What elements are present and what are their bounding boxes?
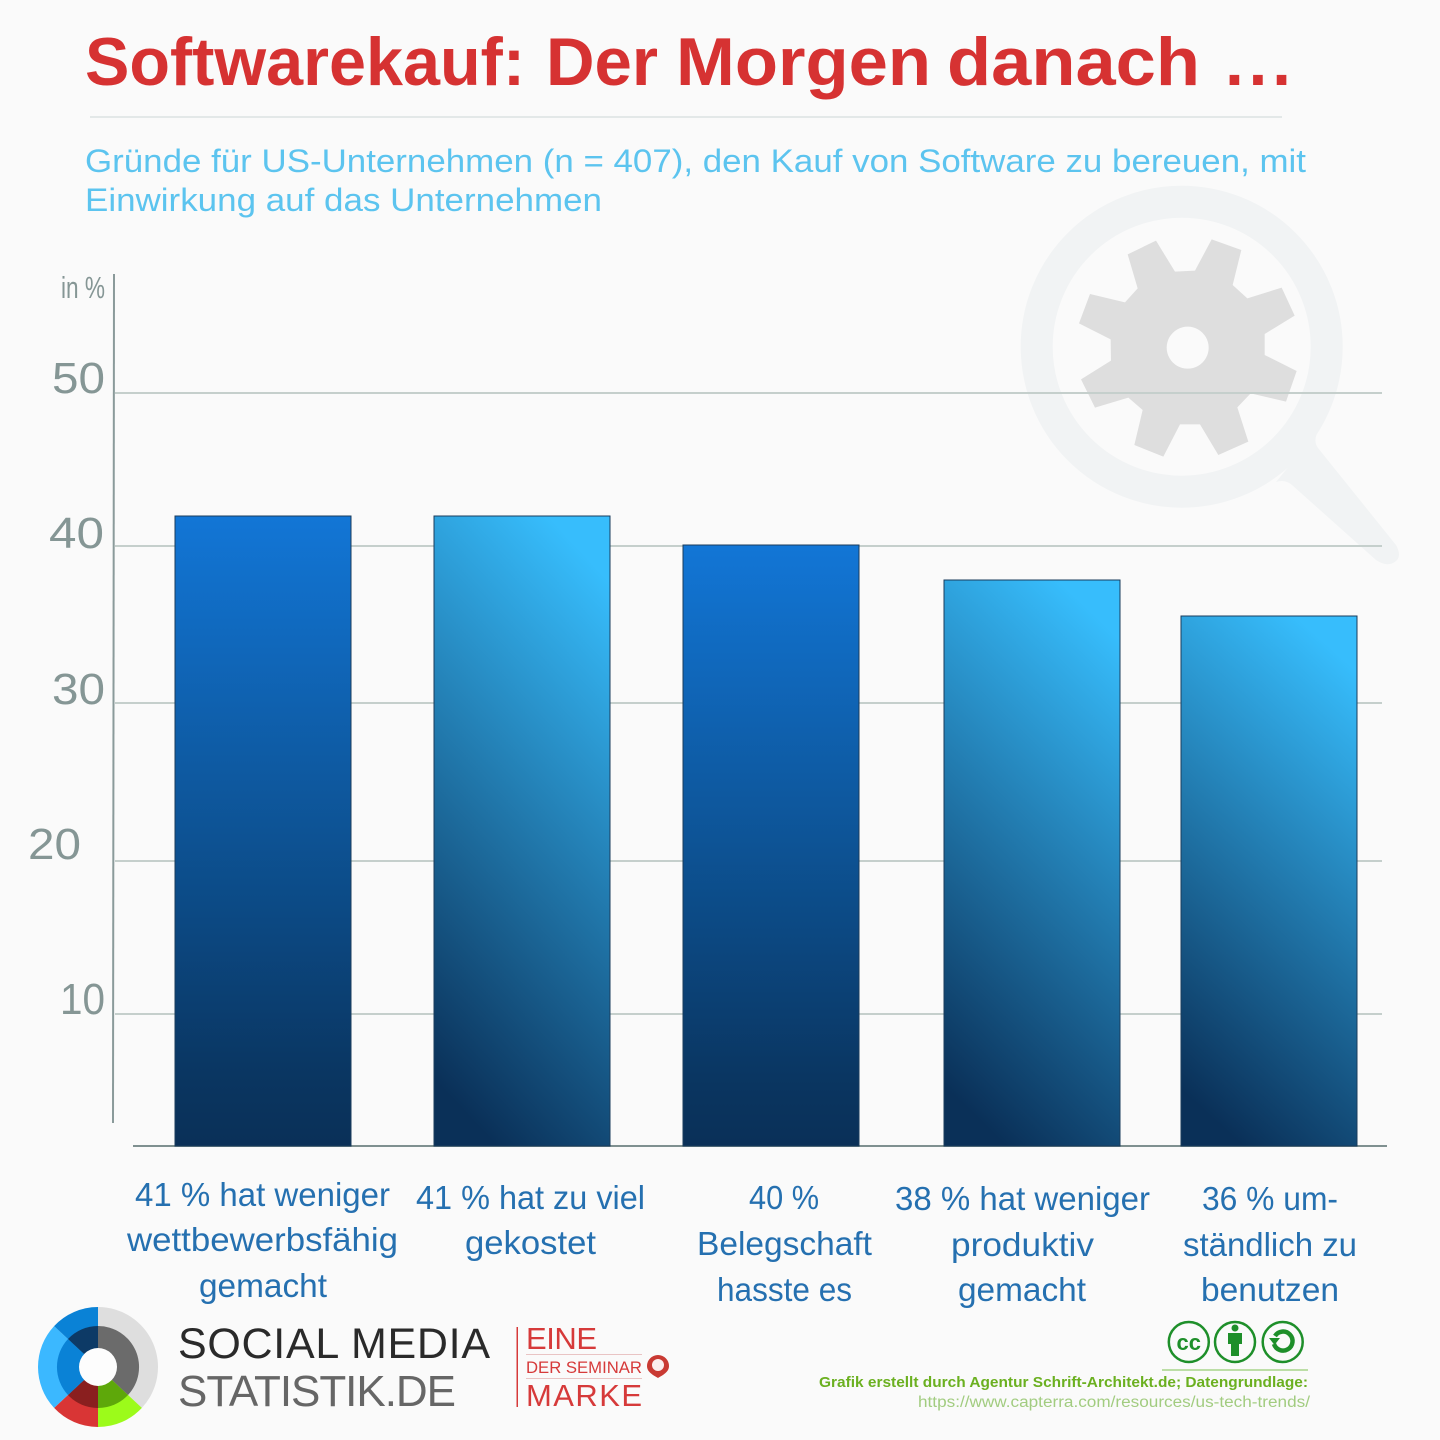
bar label 2: 41 % hat zu viel: [416, 1179, 645, 1216]
bar label 5: ständlich zu: [1183, 1226, 1357, 1263]
seminar brand mark: MARKE: [526, 1378, 642, 1413]
bar label 4: produktiv: [951, 1226, 1095, 1263]
logo wordmark: [178, 1320, 490, 1416]
title: danach: [947, 24, 1200, 100]
y axis unit: in %: [61, 270, 105, 305]
bar label 5: 36 % um-: [1202, 1180, 1338, 1217]
y axis labels: 40: [49, 509, 104, 558]
bar label 5: benutzen: [1201, 1271, 1339, 1308]
bar label 4: [895, 1180, 1150, 1308]
bar label 1: [126, 1176, 398, 1304]
logo wordmark: SOCIAL MEDIA: [178, 1320, 490, 1368]
y axis labels: 20: [28, 820, 81, 869]
credit text: Grafik erstellt durch Agentur Schrift-Architekt.de; Datengrundlage:: [819, 1374, 1308, 1391]
icon: creative commons badges: cc: [1177, 1330, 1201, 1355]
bar label 3: [697, 1179, 872, 1308]
bar label 1: 41 % hat weniger: [135, 1176, 390, 1213]
title: Morgen: [676, 24, 931, 100]
y axis labels: 10: [60, 975, 105, 1024]
bar label 1: gemacht: [199, 1267, 327, 1304]
y axis labels: 30: [52, 665, 105, 714]
bar label 3: hasste es: [717, 1271, 852, 1308]
bar label 5: [1183, 1180, 1357, 1308]
bar label 2: [416, 1179, 645, 1261]
source url: https://www.capterra.com/resources/us-tech-trends/: [918, 1394, 1311, 1411]
seminar brand mark: EINE: [526, 1321, 597, 1356]
title: Der: [546, 24, 658, 100]
icon: map pin: [647, 1355, 669, 1378]
bar label 3: 40 %: [749, 1179, 819, 1216]
subtitle: Gründe für US-Unternehmen (n = 407), den Kauf von Software zu bereuen, mit: [85, 143, 1306, 179]
bar label 3: Belegschaft: [697, 1225, 872, 1262]
logo wordmark: STATISTIK.DE: [178, 1367, 456, 1416]
bar label 2: gekostet: [465, 1224, 596, 1261]
icon: magnifier with gear: [1037, 202, 1399, 564]
title: [85, 24, 1291, 100]
bar chart: [28, 270, 1387, 1146]
seminar brand mark: DER SEMINAR: [526, 1358, 642, 1377]
subtitle: Einwirkung auf das Unternehmen: [85, 182, 602, 218]
icon: logo ring: [38, 1307, 158, 1427]
title: Softwarekauf:: [85, 24, 525, 100]
bar label 4: gemacht: [958, 1271, 1086, 1308]
title: ...: [1225, 24, 1291, 100]
bar label 1: wettbewerbsfähig: [126, 1221, 398, 1258]
subtitle: [85, 143, 1306, 218]
bar label 4: 38 % hat weniger: [895, 1180, 1150, 1217]
seminar brand mark: [516, 1321, 669, 1413]
icon: creative commons badges: [1169, 1322, 1303, 1362]
y axis labels: 50: [52, 354, 105, 403]
bars: [175, 516, 1357, 1146]
y axis labels: [28, 354, 105, 1024]
